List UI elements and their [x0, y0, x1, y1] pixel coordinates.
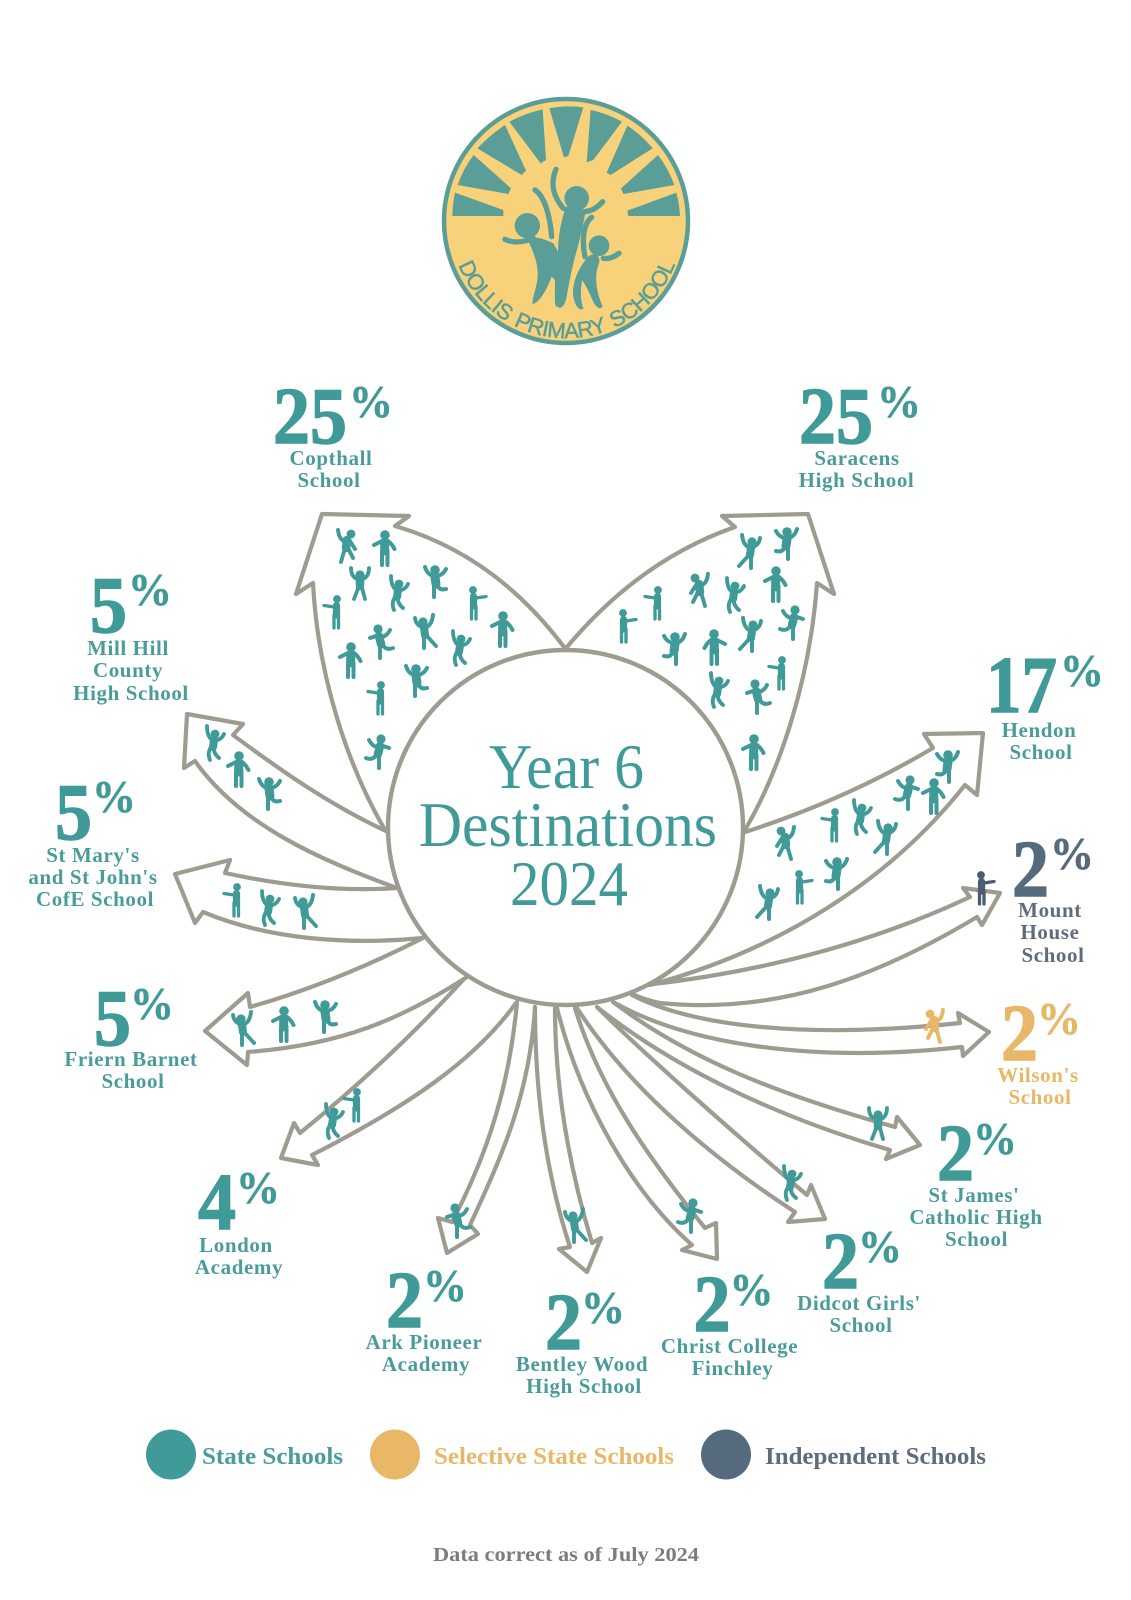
stat: Bentley Wood 2%: [516, 1279, 648, 1398]
stat: Copthall 25%: [273, 373, 393, 492]
figures: Saracens: [619, 527, 803, 769]
arrow: London Academy: [281, 980, 516, 1165]
stat: Ark Pioneer 2%: 2: [386, 1257, 423, 1345]
logo disc: [444, 99, 688, 343]
stat: Mill Hill 5%: High School: [73, 681, 189, 705]
title: Year 6: [489, 732, 644, 802]
stat: Mill Hill 5%: County: [93, 658, 163, 682]
stat: Friern Barnet 5%: %: [130, 978, 174, 1029]
stat: Wilson's 2%: Wilson's: [997, 1063, 1079, 1087]
stat: Copthall 25%: Copthall: [290, 446, 372, 470]
figures: Copthall: [324, 530, 512, 768]
arrow: Friern Barnet School: [205, 938, 467, 1065]
stat: St James' 2%: School: [945, 1227, 1008, 1251]
figure: Christ College: [678, 1198, 701, 1232]
arrow: Saracens High School: [567, 514, 834, 830]
figure: St James': [869, 1108, 887, 1139]
stat: Wilson's 2%: [997, 990, 1081, 1109]
stat: London Academy 4%: %: [236, 1162, 280, 1213]
arrow: St Mary's and St John's CofE School: [175, 860, 423, 941]
title: 2024: [510, 849, 628, 919]
stat: Didcot Girls' 2%: [797, 1218, 921, 1337]
stat: Didcot Girls' 2%: %: [858, 1221, 902, 1272]
stat: Bentley Wood 2%: Bentley Wood: [516, 1352, 648, 1376]
arrow: St James' Catholic High School: [597, 1002, 920, 1159]
arrow: Ark Pioneer Academy: [438, 1002, 535, 1253]
central circle: [388, 650, 743, 1005]
stat: St Mary's 5%: and St John's: [28, 865, 158, 889]
stat: Saracens 25%: Saracens: [814, 446, 900, 470]
logo artwork: [452, 106, 680, 339]
figure: Mount House: [977, 871, 994, 904]
stat: Friern Barnet 5%: 5: [94, 975, 131, 1063]
stat: Hendon 17%: School: [1009, 740, 1073, 764]
legend: selective state schools: Selective State Schools: [434, 1444, 674, 1470]
stat: Didcot Girls' 2%: Didcot Girls': [797, 1291, 921, 1315]
stat: St Mary's 5%: 5: [55, 769, 92, 857]
figure: Didcot: [784, 1166, 801, 1200]
stat: Copthall 25%: School: [297, 468, 361, 492]
stat: Ark Pioneer 2%: Academy: [382, 1352, 470, 1376]
stat: Mount House 2%: [1012, 826, 1094, 967]
logo: Dollis Primary School: [442, 96, 690, 346]
title: Destinations: [419, 790, 717, 860]
figures: Hendon: [757, 750, 958, 919]
stat: Saracens 25%: %: [877, 376, 921, 427]
stat: St Mary's 5%: [28, 769, 158, 911]
legend: state schools: [146, 1430, 343, 1480]
stat: St Mary's 5%: CofE School: [36, 887, 154, 911]
logo artwork: DOLLIS PRIMARY SCHOOL: [458, 260, 676, 339]
stat: Mount House 2%: House: [1020, 920, 1080, 944]
stat: Mount House 2%: Mount: [1018, 898, 1082, 922]
arrow: Mill Hill County High School: [184, 714, 397, 888]
stat: Christ College 2%: Finchley: [692, 1356, 773, 1380]
stat: St James' 2%: [909, 1110, 1043, 1251]
arrow: Wilson's School: [613, 995, 989, 1056]
stat: Christ College 2%: 2: [694, 1261, 730, 1349]
stat: London Academy 4%: Academy: [195, 1255, 283, 1279]
stat: Ark Pioneer 2%: [366, 1257, 482, 1376]
stat: Friern Barnet 5%: School: [101, 1069, 165, 1093]
stat: Copthall 25%: 25: [273, 373, 347, 461]
figures: London Academy: [326, 1088, 361, 1138]
stat: Didcot Girls' 2%: 2: [822, 1218, 859, 1306]
stat: Christ College 2%: %: [730, 1264, 774, 1315]
stat: Wilson's 2%: School: [1008, 1085, 1072, 1109]
arrow: Didcot Girls' School: [577, 1007, 825, 1222]
legend: independent schools: [701, 1430, 986, 1480]
stat: Christ College 2%: [661, 1261, 798, 1380]
stat: Bentley Wood 2%: High School: [526, 1374, 642, 1398]
stat: St James' 2%: St James': [928, 1183, 1020, 1207]
stat: Hendon 17%: %: [1060, 645, 1104, 696]
stat: Wilson's 2%: 2: [1001, 990, 1038, 1078]
stat: Didcot Girls' 2%: School: [829, 1313, 893, 1337]
stat: Hendon 17%: [986, 642, 1104, 764]
stat: St James' 2%: 2: [937, 1110, 974, 1198]
title: [419, 732, 717, 919]
footer note: Data correct as of July 2024: [433, 1544, 699, 1566]
stat: Mount House 2%: %: [1050, 828, 1094, 879]
stat: Saracens 25%: 25: [799, 373, 873, 461]
figures: Mill Hill: [207, 726, 280, 809]
stat: Mill Hill 5%: [73, 562, 189, 705]
stat: London Academy 4%: London: [199, 1233, 273, 1257]
arrow: Mount House School: [632, 871, 1000, 1005]
stat: St James' 2%: Catholic High: [909, 1205, 1043, 1229]
stat: Ark Pioneer 2%: Ark Pioneer: [366, 1330, 482, 1354]
arrow: Hendon School: [650, 733, 983, 985]
legend: independent schools: Independent Schools: [765, 1444, 986, 1470]
figures: St Mary's: [224, 883, 316, 928]
arrow: Bentley Wood High School: [535, 1007, 601, 1272]
stat: Mill Hill 5%: Mill Hill: [87, 636, 169, 660]
legend: selective state schools: [370, 1430, 674, 1480]
legend: [146, 1430, 986, 1480]
stat: Friern Barnet 5%: Friern Barnet: [64, 1047, 198, 1071]
stat: Hendon 17%: Hendon: [1002, 718, 1076, 742]
stat: Mill Hill 5%: %: [128, 564, 172, 615]
figure: Ark Pioneer: [447, 1203, 470, 1237]
figure: Wilson's: [926, 1010, 943, 1042]
stat: Friern Barnet 5%: [64, 975, 198, 1093]
stat: Christ College 2%: Christ College: [661, 1334, 798, 1358]
stat: Wilson's 2%: %: [1037, 993, 1081, 1044]
stat: London Academy 4%: [195, 1159, 283, 1279]
stat: London Academy 4%: 4: [198, 1159, 236, 1247]
stat: Bentley Wood 2%: %: [581, 1282, 625, 1333]
stat: St Mary's 5%: %: [92, 771, 136, 822]
stat: Copthall 25%: %: [349, 376, 393, 427]
stat: Mount House 2%: 2: [1012, 826, 1049, 914]
stat: Saracens 25%: [799, 373, 921, 492]
stat: Hendon 17%: 17: [986, 642, 1057, 730]
stat: Ark Pioneer 2%: %: [423, 1260, 467, 1311]
stat: Bentley Wood 2%: 2: [545, 1279, 582, 1367]
stat: St James' 2%: %: [973, 1113, 1017, 1164]
stat: Mill Hill 5%: 5: [90, 562, 127, 650]
legend: state schools: State Schools: [202, 1444, 343, 1470]
figure: Bentley Wood: [565, 1209, 586, 1242]
stat: Mount House 2%: School: [1021, 943, 1085, 967]
arrow: Copthall School: [296, 514, 564, 830]
arrow: Christ College Finchley: [557, 1008, 717, 1259]
stat: Saracens 25%: High School: [799, 468, 914, 492]
figures: Friern Barnet: [233, 1000, 336, 1045]
stat: St Mary's 5%: St Mary's: [46, 843, 140, 867]
